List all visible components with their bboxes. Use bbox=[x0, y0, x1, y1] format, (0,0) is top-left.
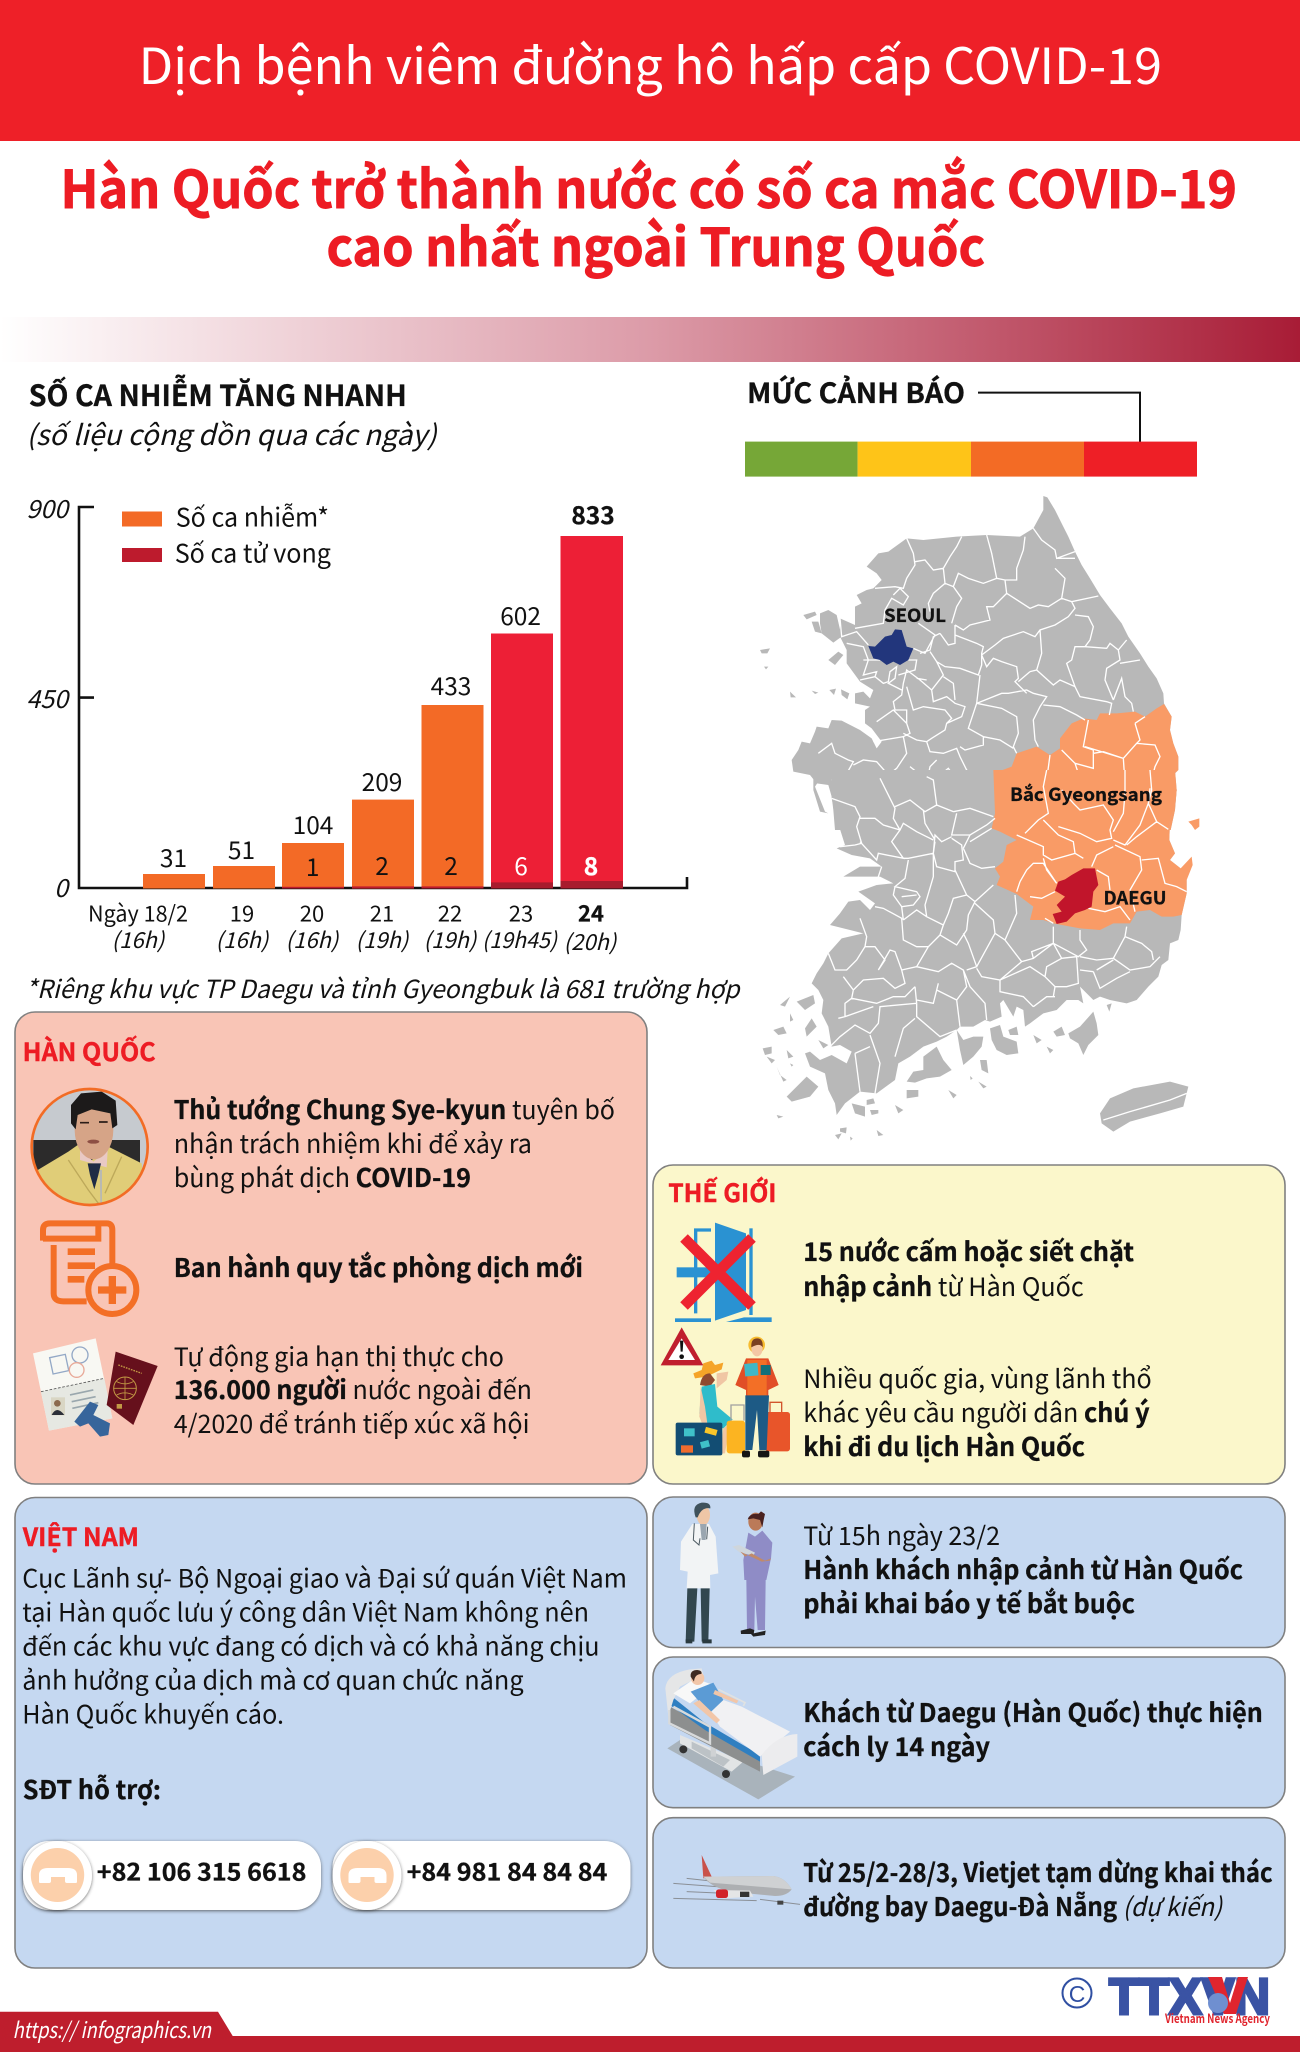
text: flight suspension: đường bay Daegu-Đà Nẵng (dự kiến) bbox=[803, 1887, 1223, 1924]
bar value labels: 209 bbox=[362, 764, 402, 799]
southern Gyeongbuk region bbox=[992, 770, 1193, 930]
text: entry bans: 15 nước cấm hoặc siết chặt bbox=[803, 1232, 1134, 1269]
map labels: SEOUL bbox=[884, 602, 946, 628]
map of South Korea bbox=[760, 496, 1199, 1141]
bar value labels: 833 bbox=[571, 497, 615, 532]
warning level heading and scale bbox=[745, 372, 1197, 477]
icon: hospital bed bbox=[665, 1668, 797, 1799]
x axis labels: 23 bbox=[509, 896, 533, 928]
text: travel warning: Nhiều quốc gia, vùng lãnh thổ bbox=[803, 1359, 1152, 1396]
northern Gyeongbuk region bbox=[987, 704, 1178, 830]
text: visa extension: Tự động gia hạn thị thực cho bbox=[174, 1337, 504, 1374]
text: prime minister bbox=[174, 1090, 615, 1195]
northern mainland bbox=[792, 496, 1178, 830]
text: medical declaration: Từ 15h ngày 23/2 bbox=[803, 1516, 1000, 1553]
bar value labels bbox=[160, 497, 615, 884]
phone pill 2: +84 981 84 84 84 bbox=[407, 1852, 607, 1888]
panel: Daegu quarantine bbox=[653, 1657, 1285, 1808]
x axis labels: (16h) bbox=[286, 923, 340, 955]
footer band bbox=[0, 2012, 1300, 2052]
icon: document with plus bbox=[43, 1223, 136, 1314]
phone pill 1 bbox=[23, 1841, 321, 1910]
x axis labels: (20h) bbox=[564, 925, 618, 957]
legend bbox=[122, 498, 332, 570]
text: quarantine: cách ly 14 ngày bbox=[803, 1727, 990, 1764]
y axis labels: 0 bbox=[54, 869, 71, 905]
phone pill 2 bbox=[332, 1841, 630, 1910]
x axis labels: Ngày 18/2 bbox=[88, 896, 188, 928]
text: visa extension: 136.000 người nước ngoài đến bbox=[174, 1370, 532, 1407]
heading: VIỆT NAM bbox=[22, 1518, 139, 1554]
chart heading bbox=[26, 373, 438, 454]
northern district boundaries bbox=[818, 528, 1175, 828]
map labels bbox=[884, 602, 1166, 910]
bars bbox=[143, 536, 623, 889]
x axis labels: 22 bbox=[438, 896, 462, 928]
logo: TTXVN: Vietnam News Agency bbox=[1164, 2008, 1270, 2027]
x axis labels: 21 bbox=[370, 896, 394, 928]
bar value labels: 6 bbox=[514, 848, 528, 883]
logo: TTXVN: TTXVN bbox=[1109, 1968, 1270, 2025]
y axis labels: 900 bbox=[26, 490, 71, 526]
footer band: https:// infographics.vn bbox=[13, 2013, 212, 2045]
text: visa extension: 4/2020 để tránh tiếp xúc xã hội bbox=[174, 1404, 529, 1441]
text: flight suspension bbox=[803, 1853, 1273, 1924]
panel: Vietjet route bbox=[653, 1818, 1285, 1968]
bar value labels: 1 bbox=[306, 849, 320, 884]
icon: airplane bbox=[673, 1855, 800, 1905]
x axis labels bbox=[88, 896, 618, 957]
gradient divider bar bbox=[0, 317, 1300, 362]
text: quarantine bbox=[803, 1693, 1263, 1764]
main title: Hàn Quốc trở thành nước có số ca mắc COVID-19 bbox=[60, 148, 1237, 223]
axes bbox=[79, 507, 687, 888]
panel: Hàn Quốc bbox=[15, 1012, 647, 1484]
text: medical declaration: Hành khách nhập cảnh từ Hàn Quốc bbox=[803, 1550, 1243, 1587]
x axis labels: 24 bbox=[578, 896, 604, 928]
legend: Số ca nhiễm* bbox=[176, 498, 329, 534]
text: entry bans: nhập cảnh từ Hàn Quốc bbox=[803, 1267, 1084, 1304]
x axis labels: (19h45) bbox=[482, 923, 559, 955]
text: travel warning: khác yêu cầu người dân chú ý bbox=[803, 1393, 1150, 1430]
map labels: DAEGU bbox=[1104, 884, 1166, 910]
bar value labels: 602 bbox=[500, 598, 541, 633]
logo: TTXVN: C bbox=[1069, 1981, 1085, 2007]
x axis labels: (16h) bbox=[112, 923, 166, 955]
icon: closed door crossed out bbox=[675, 1223, 772, 1322]
x axis labels: 19 bbox=[230, 896, 254, 928]
heading: THẾ GIỚI bbox=[668, 1174, 776, 1210]
chart heading: (số liệu cộng dồn qua các ngày) bbox=[26, 414, 438, 454]
warning level heading and scale: MỨC CẢNH BÁO bbox=[747, 372, 965, 412]
icon: doctor and nurse bbox=[680, 1503, 772, 1643]
y axis labels: 450 bbox=[26, 680, 71, 716]
bar value labels: 8 bbox=[584, 848, 598, 883]
map labels: Bắc Gyeongsang bbox=[1010, 781, 1162, 807]
Daegu bbox=[1053, 868, 1098, 924]
advisory paragraph: Cục Lãnh sự- Bộ Ngoại giao và Đại sứ quán Việt Nam bbox=[22, 1558, 627, 1596]
icon: warning sign and travellers bbox=[661, 1327, 790, 1457]
support phone label: SĐT hỗ trợ: bbox=[23, 1770, 161, 1807]
x axis labels: (16h) bbox=[216, 923, 270, 955]
Seoul bbox=[868, 629, 913, 665]
text: medical declaration bbox=[803, 1516, 1243, 1621]
text: new rules: Ban hành quy tắc phòng dịch mới bbox=[174, 1248, 583, 1285]
advisory paragraph: ảnh hưởng của dịch mà cơ quan chức năng bbox=[22, 1660, 524, 1698]
advisory paragraph: tại Hàn quốc lưu ý công dân Việt Nam không nên bbox=[22, 1592, 589, 1630]
bar value labels: 104 bbox=[293, 807, 333, 842]
text: travel warning: khi đi du lịch Hàn Quốc bbox=[803, 1427, 1085, 1464]
panel: Việt Nam bbox=[15, 1498, 647, 1968]
bar value labels: 2 bbox=[444, 848, 458, 883]
text: prime minister: bùng phát dịch COVID-19 bbox=[174, 1158, 471, 1195]
text: flight suspension: Từ 25/2-28/3, Vietjet tạm dừng khai thác bbox=[803, 1853, 1273, 1890]
icon: prime minister portrait bbox=[28, 1087, 152, 1207]
bar value labels: 433 bbox=[431, 668, 471, 703]
x axis labels: 20 bbox=[300, 896, 324, 928]
bar value labels: 2 bbox=[375, 848, 389, 883]
panel: medical declaration bbox=[653, 1497, 1285, 1648]
northern islands bbox=[760, 610, 849, 813]
bar value labels: 51 bbox=[228, 832, 255, 867]
southern district boundaries bbox=[828, 770, 1187, 1120]
x axis labels: (19h) bbox=[424, 923, 478, 955]
text: medical declaration: phải khai báo y tế bắt buộc bbox=[803, 1584, 1135, 1621]
advisory paragraph: đến các khu vực đang có dịch và có khả năng chịu bbox=[22, 1626, 600, 1664]
text: entry bans bbox=[803, 1232, 1134, 1304]
bar chart bbox=[26, 490, 687, 957]
main title bbox=[60, 148, 1237, 281]
panel: Thế giới bbox=[653, 1165, 1285, 1484]
legend: Số ca tử vong bbox=[175, 534, 332, 570]
southern mainland bbox=[805, 770, 1187, 1115]
header band bbox=[0, 0, 1300, 141]
y axis labels bbox=[26, 490, 71, 905]
text: visa extension bbox=[174, 1337, 532, 1441]
header band: Dịch bệnh viêm đường hô hấp cấp COVID-19 bbox=[139, 27, 1162, 99]
bar value labels: 31 bbox=[160, 840, 187, 875]
chart heading: SỐ CA NHIỄM TĂNG NHANH bbox=[29, 373, 407, 415]
footnote: *Riêng khu vực TP Daegu và tỉnh Gyeongbuk là 681 trường hợp bbox=[26, 970, 741, 1006]
heading: HÀN QUỐC bbox=[23, 1033, 156, 1069]
icon: passports bbox=[33, 1338, 158, 1437]
x axis labels: (19h) bbox=[356, 923, 410, 955]
text: travel warning bbox=[803, 1359, 1152, 1464]
text: quarantine: Khách từ Daegu (Hàn Quốc) thực hiện bbox=[803, 1693, 1263, 1730]
advisory paragraph bbox=[22, 1558, 627, 1732]
text: prime minister: nhận trách nhiệm khi để xảy ra bbox=[174, 1124, 532, 1161]
southern islands and Jeju bbox=[763, 995, 1188, 1141]
main title: cao nhất ngoài Trung Quốc bbox=[326, 206, 985, 281]
phone pill 1: +82 106 315 6618 bbox=[97, 1852, 306, 1888]
text: prime minister: Thủ tướng Chung Sye-kyun tuyên bố bbox=[174, 1090, 615, 1127]
advisory paragraph: Hàn Quốc khuyến cáo. bbox=[22, 1694, 284, 1732]
